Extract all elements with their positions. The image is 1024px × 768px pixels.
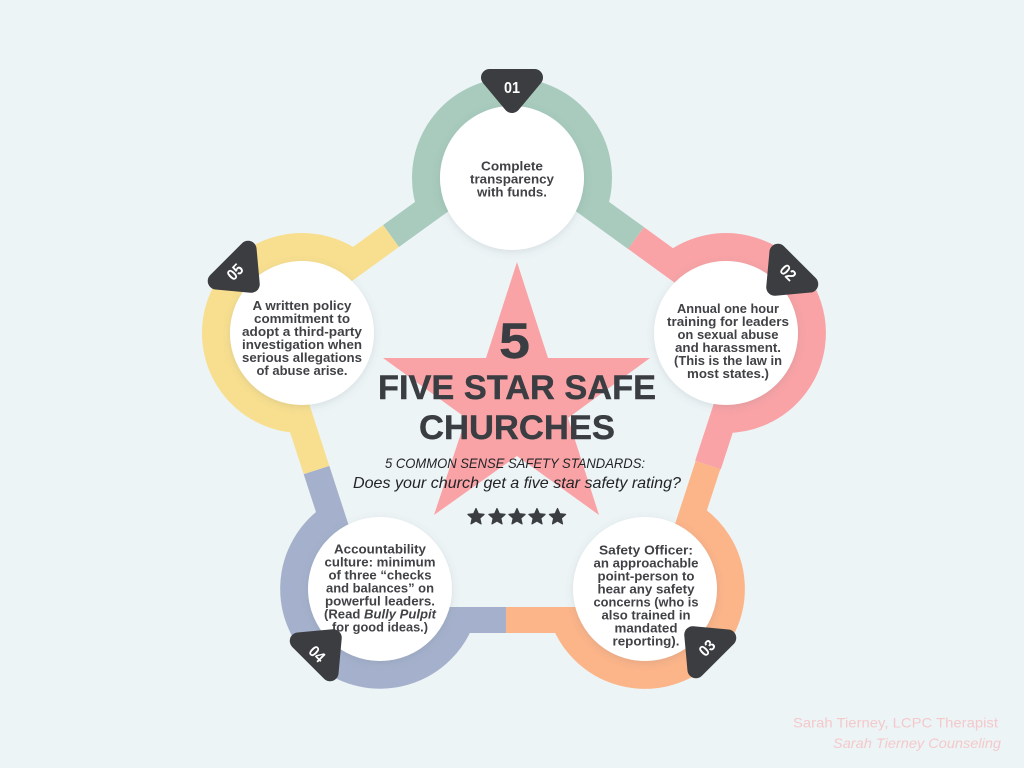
- badge 01: 01: [504, 80, 520, 97]
- subtitle line 1: 5 COMMON SENSE SAFETY STANDARDS:: [385, 455, 645, 471]
- step 03 text: also trained in: [602, 608, 691, 622]
- step 05: [230, 261, 374, 405]
- step 02 text: on sexual abuse: [678, 327, 778, 342]
- step 05 text: [242, 298, 363, 378]
- step 04 text: (Read Bully Pulpit: [324, 606, 437, 622]
- step 05 text: A written policy: [252, 298, 352, 313]
- ring segment 03: orange: [506, 465, 731, 675]
- heading line 2: CHURCHES: [419, 409, 615, 447]
- numeral 5: 5: [499, 313, 530, 369]
- credit organisation: Sarah Tierney Counseling: [833, 735, 1001, 751]
- step 02 text: Annual one hour: [677, 301, 779, 316]
- badge 05: 05: [224, 261, 247, 284]
- heading line 1: FIVE STAR SAFE: [378, 369, 656, 407]
- step 03 text: concerns (who is: [594, 594, 698, 610]
- badge 02: 02: [776, 262, 799, 285]
- badge 03: 03: [696, 637, 719, 660]
- step 02: [654, 261, 798, 405]
- step 04 text: culture: minimum: [324, 554, 436, 570]
- credit: [793, 714, 1001, 751]
- badge 01: [490, 78, 534, 104]
- step 01 text: with funds.: [476, 184, 547, 200]
- badge 02: [759, 252, 810, 303]
- step 03 text: hear any safety: [598, 582, 695, 596]
- step 05 text: of abuse arise.: [256, 363, 348, 378]
- step 04 text: Accountability: [334, 542, 427, 556]
- step 03: [573, 517, 717, 661]
- step 04 text: [324, 542, 437, 634]
- step 05 text: serious allegations: [242, 350, 362, 365]
- step 04 text: of three “checks: [328, 568, 432, 582]
- step 01 text: Complete: [481, 158, 543, 174]
- step 05 text: commitment to: [254, 311, 350, 326]
- ring segment 02: pink: [636, 238, 812, 465]
- step 04: [308, 517, 452, 661]
- five star rating: [468, 508, 566, 524]
- step 03 text: reporting).: [612, 634, 680, 648]
- step 03 text: an approachable: [594, 556, 698, 570]
- step 01 text: transparency: [470, 172, 555, 186]
- step 03 text: [594, 542, 698, 648]
- credit name: Sarah Tierney, LCPC Therapist: [793, 714, 998, 730]
- ring segment 04: blue: [294, 470, 506, 675]
- step 02 text: (This is the law in: [674, 353, 782, 368]
- step 02 text: [667, 301, 789, 381]
- step 02 text: training for leaders: [667, 314, 789, 329]
- badge 03: [677, 619, 728, 670]
- ring segment 01: green: [391, 92, 636, 238]
- step 03 text: mandated: [614, 620, 678, 636]
- pentagon ring: [216, 92, 812, 675]
- step 05 text: investigation when: [242, 337, 362, 352]
- central star: [383, 262, 650, 515]
- subtitle: [353, 455, 681, 492]
- step 01: [440, 106, 584, 250]
- subtitle line 2: Does your church get a five star safety rating?: [353, 475, 681, 492]
- step 03 text: Safety Officer:: [599, 542, 693, 558]
- step 04 text: powerful leaders.: [325, 594, 435, 608]
- badge 04: [298, 622, 349, 673]
- step 02 text: and harassment.: [675, 340, 781, 355]
- badge 05: [216, 249, 267, 300]
- step 05 text: adopt a third-party: [242, 324, 363, 339]
- title block: [378, 313, 656, 447]
- badge 04: 04: [305, 643, 328, 666]
- step 04 text: and balances” on: [326, 580, 434, 596]
- step 01 text: [470, 158, 555, 200]
- step 04 text: for good ideas.): [332, 620, 428, 634]
- step 03 text: point-person to: [598, 568, 695, 584]
- ring segment 05: yellow: [216, 236, 391, 470]
- step 02 text: most states.): [687, 366, 769, 381]
